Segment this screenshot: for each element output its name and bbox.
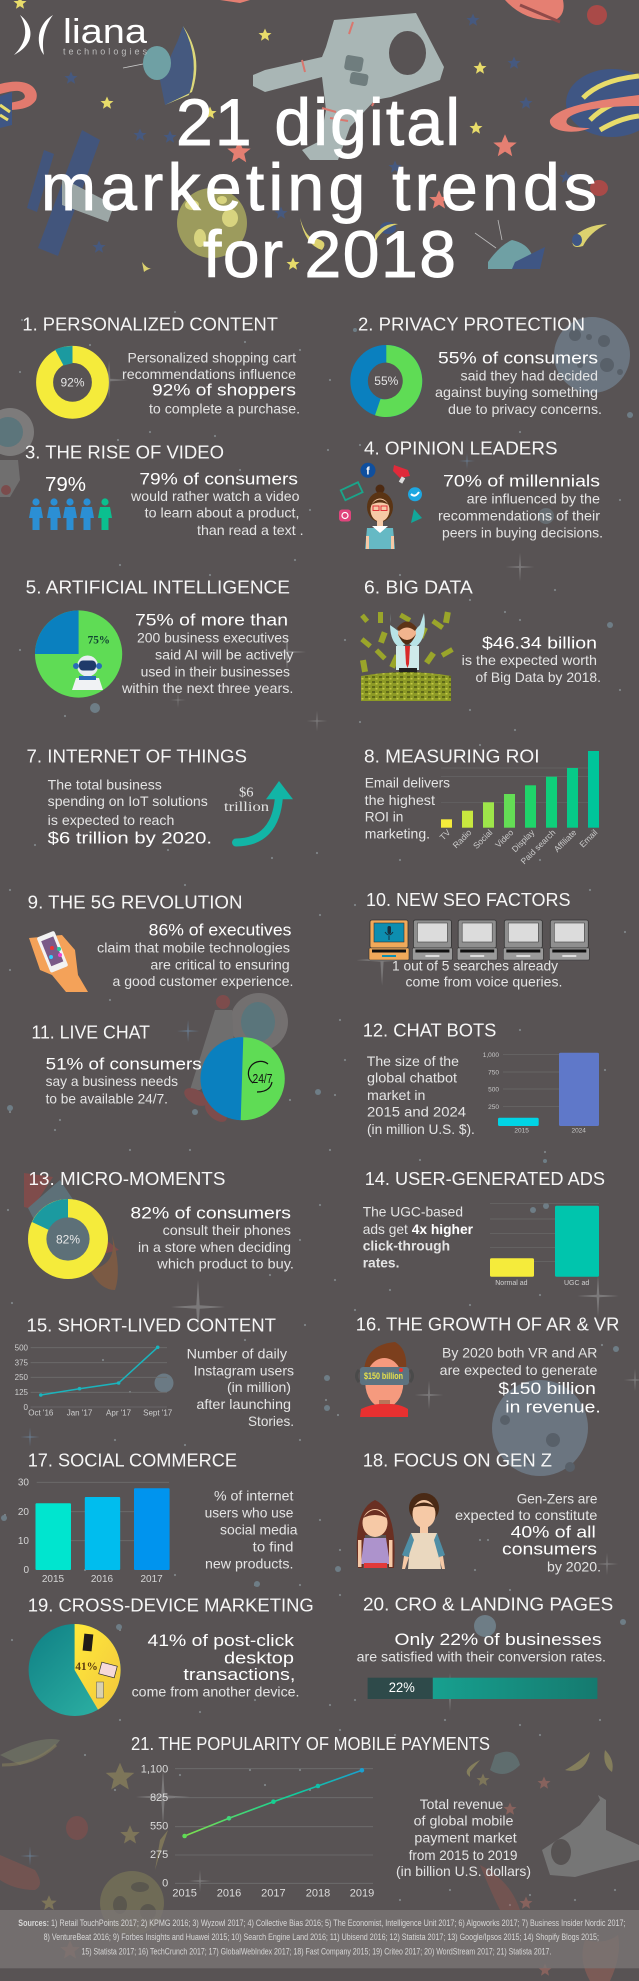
line chart: Apr '17 — [106, 1408, 132, 1417]
text — [130, 469, 304, 538]
progress bar 22%: 22% — [389, 1680, 415, 1695]
text: in revenue. — [505, 1398, 601, 1417]
text: payment market — [414, 1830, 517, 1846]
title: 21 digital — [176, 85, 460, 159]
bar chart: Social — [471, 827, 494, 851]
text: % of internet — [214, 1488, 294, 1504]
text: rates. — [363, 1254, 399, 1270]
illustration: yellow moon — [177, 188, 247, 258]
bar chart: 30 — [18, 1478, 29, 1488]
panel: 8 measuring ROI — [364, 745, 599, 866]
bar chart: 750 — [488, 1070, 499, 1076]
bar chart: Display — [510, 827, 537, 854]
pie chart 75%: 75% — [88, 634, 110, 646]
decor: footer space illustrations — [0, 1739, 639, 1981]
text: of global mobile — [414, 1813, 514, 1829]
bar chart: 250 — [488, 1104, 499, 1111]
bar chart: Affiliate — [552, 827, 579, 854]
panel: 17 social commerce — [18, 1450, 298, 1585]
pie chart 41%: 41% — [75, 1659, 98, 1673]
heading: 5. ARTIFICIAL INTELLIGENCE — [26, 576, 290, 597]
text: consumers — [502, 1539, 597, 1558]
line chart: 2018 — [306, 1888, 330, 1900]
bar chart: 2015 — [514, 1128, 529, 1134]
heading: 8. MEASURING ROI — [364, 745, 540, 766]
text: The total business — [48, 776, 162, 792]
text: are expected to generate — [440, 1362, 598, 1378]
text — [97, 920, 293, 989]
text: spending on IoT solutions — [48, 793, 208, 809]
text: Stories. — [248, 1413, 294, 1429]
progress bar 22% — [368, 1678, 597, 1699]
text: 200 business executives — [137, 630, 289, 646]
icon: people row — [29, 498, 112, 530]
icon: businessman in money — [360, 612, 454, 701]
icon: growth arrow — [236, 781, 293, 842]
line chart: 2015 — [172, 1888, 197, 1900]
figure 79%: 79% — [45, 474, 86, 496]
logo: technologies — [63, 46, 148, 56]
text — [122, 349, 300, 416]
text — [367, 1053, 475, 1137]
text: The UGC-based — [363, 1204, 463, 1220]
bar chart: 1,000 — [483, 1052, 499, 1059]
text: Number of daily — [187, 1345, 287, 1361]
heading: 1. PERSONALIZED CONTENT — [22, 314, 278, 335]
label: $6 trillion: $6 — [239, 786, 254, 801]
panel: 7 internet of things — [26, 745, 293, 847]
text: by 2020. — [547, 1559, 601, 1575]
decor: astronaut behind live chat — [181, 993, 288, 1126]
panel: 11 live chat — [31, 1021, 285, 1120]
text: to learn about a product, — [145, 505, 300, 521]
text: come from voice queries. — [406, 974, 562, 990]
text: expected to constitute — [455, 1507, 598, 1523]
text: say a business needs — [46, 1073, 178, 1089]
text: 92% of shoppers — [152, 381, 296, 400]
logo — [14, 13, 148, 56]
heading: 7. INTERNET OF THINGS — [26, 745, 247, 766]
line chart: 250 — [15, 1373, 29, 1382]
heading: 11. LIVE CHAT — [31, 1021, 150, 1042]
title — [41, 85, 597, 291]
text: would rather watch a video — [130, 488, 300, 504]
panel: 1 personalized content — [22, 314, 300, 416]
illustration: astronaut — [253, 13, 444, 160]
text: from 2015 to 2019 — [409, 1847, 518, 1863]
decor: rocket behind micro-moments — [24, 1173, 119, 1290]
icon: person with VR headset: $150 billion — [364, 1371, 403, 1381]
text: is the expected worth — [462, 652, 597, 668]
icon: robot — [72, 656, 103, 690]
text: recommendations influence — [122, 366, 296, 382]
illustration: lower ufo and comets — [142, 218, 607, 272]
heading: 6. BIG DATA — [364, 576, 473, 597]
line chart: 275 — [150, 1849, 168, 1861]
bar chart: 2016 — [91, 1574, 114, 1585]
text — [132, 1631, 300, 1700]
bar chart: Video — [493, 827, 516, 850]
text: $6 trillion by 2020. — [48, 828, 212, 847]
donut chart 92%: 92% — [60, 376, 85, 390]
illustration: left planet — [0, 82, 37, 128]
panel: 2 privacy protection — [358, 314, 602, 417]
line chart: 2017 — [261, 1888, 286, 1900]
text: of Big Data by 2018. — [476, 669, 601, 685]
pie chart 51% — [200, 1037, 285, 1120]
bar chart — [438, 751, 599, 866]
panel: 5 artificial intelligence — [26, 576, 293, 698]
illustration: stars — [14, 0, 572, 270]
sources text — [18, 1918, 626, 1956]
bar chart: Normal ad — [495, 1280, 528, 1287]
heading: 19. CROSS-DEVICE MARKETING — [28, 1595, 314, 1616]
heading: 18. FOCUS ON GEN Z — [363, 1450, 552, 1471]
text: 41% of post-click — [148, 1631, 295, 1650]
text: said they had decided — [460, 367, 598, 383]
text: By 2020 both VR and AR — [442, 1345, 597, 1361]
text — [121, 611, 293, 696]
line chart: Oct '16 — [28, 1408, 54, 1417]
line chart: 825 — [150, 1792, 168, 1804]
text: are critical to ensuring — [150, 956, 290, 972]
line chart: 1,100 — [141, 1764, 168, 1776]
line chart: 0 — [162, 1878, 168, 1890]
text: The size of the — [367, 1053, 459, 1069]
text: consult their phones — [163, 1222, 291, 1238]
heading: 12. CHAT BOTS — [363, 1020, 496, 1041]
text: click-through — [363, 1238, 450, 1254]
decor: header space illustrations — [0, 0, 639, 272]
text: (in million U.S. $). — [367, 1121, 475, 1137]
title: marketing trends — [41, 150, 597, 224]
text: 2015 and 2024 — [367, 1104, 466, 1120]
donut chart 82%: 82% — [56, 1232, 80, 1246]
decor: moon behind privacy protection — [554, 317, 630, 393]
text: Email delivers — [365, 775, 450, 791]
text: are influenced by the — [467, 490, 600, 506]
line chart — [15, 1344, 173, 1417]
panel: 6 big data — [360, 576, 601, 701]
text: Only 22% of businesses — [394, 1630, 602, 1649]
label: $6 trillion: trillion — [224, 800, 269, 815]
panel: 3 the rise of video — [25, 441, 304, 538]
text — [392, 958, 562, 990]
text: users who use — [205, 1505, 294, 1521]
bar chart: TV — [438, 827, 453, 842]
text: claim that mobile technologies — [97, 940, 290, 956]
bar chart — [490, 1203, 599, 1287]
icon: girl and boy — [357, 1493, 445, 1569]
panel: 13 micro-moments — [28, 1168, 294, 1279]
heading: 14. USER-GENERATED ADS — [365, 1168, 605, 1189]
text: (in million) — [227, 1379, 291, 1395]
text: (in billion U.S. dollars) — [396, 1863, 531, 1879]
panel: 14 user-generated ads — [363, 1168, 605, 1287]
text: 70% of millennials — [443, 472, 600, 491]
heading: 20. CRO & LANDING PAGES — [363, 1594, 613, 1615]
line chart — [141, 1764, 374, 1900]
icon: woman with social icons: f — [366, 466, 370, 478]
donut chart 92% — [45, 346, 100, 410]
bar chart: Paid search — [519, 827, 558, 866]
panel: sources — [0, 1910, 639, 1968]
text: within the next three years. — [121, 680, 293, 696]
text: ROI in — [365, 809, 403, 825]
text: marketing. — [365, 826, 430, 842]
text: after launching — [196, 1396, 291, 1412]
text — [187, 1345, 294, 1429]
text — [435, 348, 602, 417]
text: market in — [367, 1087, 425, 1103]
line chart: 500 — [15, 1344, 29, 1352]
text: 40% of all — [511, 1522, 596, 1541]
text: global chatbot — [367, 1070, 457, 1086]
text: 55% of consumers — [438, 348, 598, 367]
heading: 10. NEW SEO FACTORS — [366, 889, 570, 910]
heading: 15. SHORT-LIVED CONTENT — [26, 1315, 276, 1336]
bar chart: UGC ad — [564, 1280, 589, 1287]
bar chart: 20 — [18, 1507, 29, 1518]
logo: liana — [63, 13, 147, 51]
text: said AI will be actively — [155, 646, 293, 662]
line chart: 0 — [24, 1403, 29, 1412]
heading: 4. OPINION LEADERS — [364, 438, 558, 459]
pie chart 75% — [35, 610, 122, 698]
text: Instagram users — [194, 1362, 294, 1378]
text: ads get 4x higher — [363, 1221, 474, 1237]
text: used in their businesses — [141, 663, 290, 679]
bar chart: 2024 — [571, 1128, 586, 1134]
text: 86% of executives — [149, 920, 291, 939]
text: against buying something — [435, 384, 598, 400]
bar chart: 0 — [23, 1565, 29, 1576]
panel: 12 chat bots — [363, 1020, 599, 1137]
text — [365, 775, 450, 842]
text: to find — [253, 1538, 293, 1554]
text — [130, 1203, 294, 1272]
text: 82% of consumers — [130, 1203, 291, 1222]
text: $150 billion — [498, 1379, 596, 1398]
text: social media — [220, 1522, 298, 1538]
donut chart 82% — [28, 1199, 108, 1279]
bar chart: 500 — [488, 1086, 499, 1094]
illustration: right ringed planet — [550, 69, 639, 137]
line chart: 2016 — [217, 1888, 241, 1900]
line chart: 2019 — [350, 1888, 374, 1900]
heading: 3. THE RISE OF VIDEO — [25, 441, 224, 462]
text — [363, 1204, 474, 1270]
text: than read a text . — [197, 522, 304, 538]
text: 75% of more than — [135, 611, 288, 630]
icon: woman with social icons — [339, 463, 422, 549]
text — [438, 472, 603, 540]
label: $6 trillion — [224, 786, 269, 815]
bar chart: 2015 — [42, 1574, 65, 1585]
text: to complete a purchase. — [149, 400, 300, 416]
decor: small moon — [154, 1374, 174, 1392]
illustration: dish ufo — [123, 26, 196, 105]
heading: 9. THE 5G REVOLUTION — [28, 891, 243, 912]
illustration: top planets — [220, 0, 608, 196]
text: in a store when deciding — [138, 1239, 291, 1255]
text: desktop — [224, 1648, 294, 1667]
donut chart 55% — [359, 345, 422, 417]
panel: 10 new SEO factors — [366, 889, 589, 990]
text — [205, 1488, 298, 1571]
line chart: 550 — [150, 1820, 168, 1832]
illustration: satellite — [27, 130, 114, 256]
line chart: 125 — [15, 1388, 29, 1397]
panel: 20 CRO and landing pages — [357, 1594, 613, 1699]
bar chart — [18, 1478, 170, 1585]
text: recommendations of their — [438, 508, 600, 524]
text: Gen-Zers are — [517, 1490, 598, 1506]
text: to be available 24/7. — [46, 1090, 168, 1106]
text: new products. — [205, 1555, 293, 1571]
decor: left astronaut — [0, 408, 34, 497]
text: peers in buying decisions. — [442, 524, 603, 540]
text — [396, 1796, 531, 1879]
heading: 2. PRIVACY PROTECTION — [358, 314, 585, 335]
text: due to privacy concerns. — [448, 401, 602, 417]
text — [48, 776, 212, 847]
bar chart — [483, 1052, 599, 1134]
text — [46, 1054, 202, 1106]
donut chart 55%: 55% — [374, 374, 399, 388]
icon: laptops one in five — [369, 920, 589, 960]
heading: 16. THE GROWTH OF AR & VR — [356, 1313, 619, 1334]
panel: 15 short-lived content — [15, 1315, 294, 1429]
pie chart 41% — [29, 1624, 121, 1716]
text — [462, 633, 601, 685]
icon: person with VR headset — [356, 1342, 412, 1417]
text: $46.34 billion — [482, 633, 597, 652]
decor: moon behind AR VR — [492, 1380, 588, 1476]
line chart: 375 — [15, 1358, 29, 1368]
heading: 13. MICRO-MOMENTS — [28, 1168, 225, 1189]
bar chart: 2017 — [140, 1574, 163, 1585]
line chart: Sept '17 — [143, 1408, 173, 1417]
text: which product to buy. — [156, 1256, 294, 1272]
title: for 2018 — [203, 217, 456, 291]
text — [455, 1490, 601, 1575]
panel: 16 the growth of AR and VR — [356, 1313, 619, 1417]
panel: 18 focus on gen Z — [357, 1450, 601, 1575]
text: come from another device. — [132, 1684, 300, 1700]
text: the highest — [365, 792, 435, 808]
text: is expected to reach — [48, 812, 174, 828]
line chart: Jan '17 — [67, 1408, 93, 1417]
text: a good customer experience. — [112, 973, 293, 989]
text: Total revenue — [420, 1796, 504, 1812]
text: Personalized shopping cart — [128, 349, 296, 365]
text — [440, 1345, 601, 1417]
panel: 4 opinion leaders — [339, 438, 603, 549]
text: 1 out of 5 searches already — [392, 958, 558, 974]
heading: 21. THE POPULARITY OF MOBILE PAYMENTS — [131, 1733, 490, 1754]
bar chart: 10 — [18, 1536, 29, 1547]
text: are satisfied with their conversion rates. — [357, 1649, 606, 1665]
text: 51% of consumers — [46, 1054, 202, 1073]
text — [357, 1630, 606, 1665]
text: transactions, — [183, 1665, 295, 1684]
panel: 21 the popularity of mobile payments — [131, 1733, 531, 1900]
icon: hand with phone — [29, 931, 88, 992]
panel: 9 the 5G revolution — [28, 891, 293, 992]
text: 79% of consumers — [139, 469, 298, 488]
panel: 19 cross-device marketing — [28, 1595, 314, 1716]
heading: 17. SOCIAL COMMERCE — [28, 1450, 237, 1471]
bar chart: Radio — [451, 827, 474, 850]
pie chart 51%: 24/7 — [252, 1071, 272, 1086]
bar chart: Email — [577, 827, 599, 849]
